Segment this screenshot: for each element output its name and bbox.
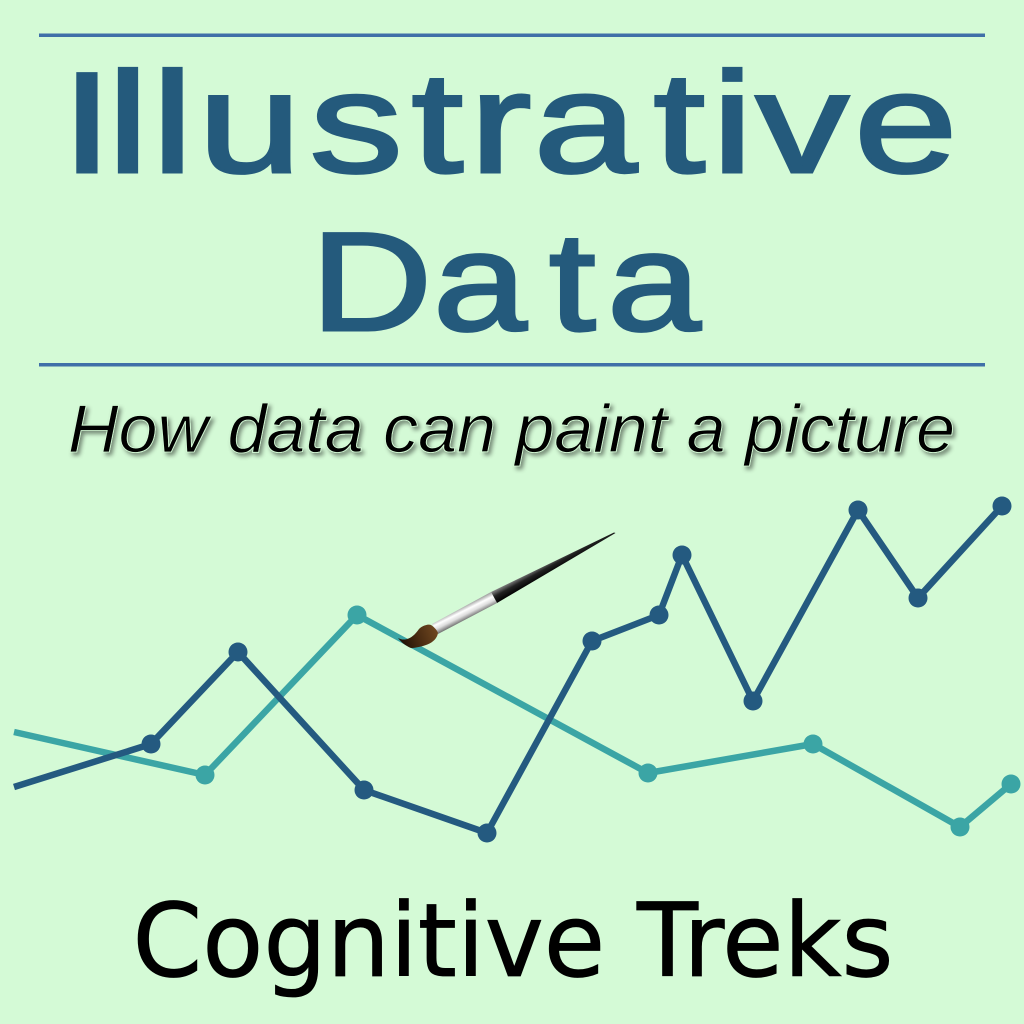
footer brand: Cognitive Treks bbox=[132, 882, 894, 1001]
teal data series bbox=[14, 606, 1020, 836]
line chart bbox=[14, 496, 1020, 842]
top rule bbox=[39, 34, 985, 37]
middle rule bbox=[39, 363, 985, 366]
title: Illustrative Data bbox=[61, 44, 957, 360]
dark blue data series bbox=[14, 496, 1012, 842]
icon: paintbrush bbox=[398, 532, 616, 648]
title: Illustrative Data: Illustrative bbox=[61, 44, 957, 203]
title: Illustrative Data: Data bbox=[311, 203, 701, 360]
subtitle: How data can paint a picture bbox=[68, 391, 955, 467]
